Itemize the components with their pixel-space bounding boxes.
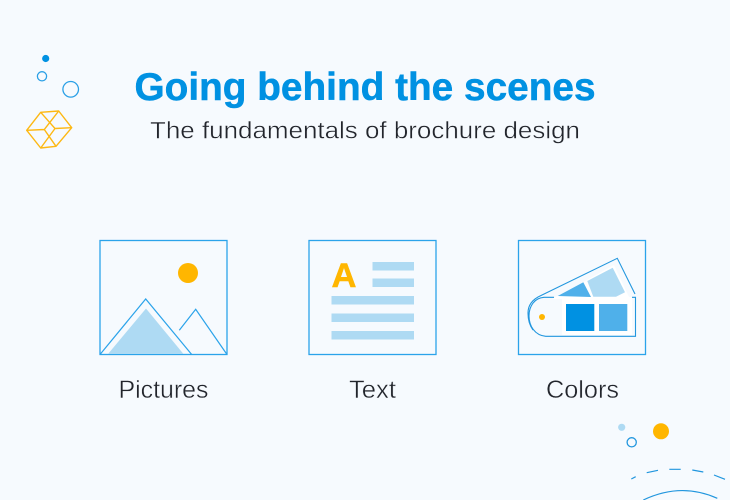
swatch: medium square [599,304,627,331]
swatch white backing [552,265,632,335]
swatch: light [587,268,625,297]
frame [309,240,436,354]
frame [518,240,646,354]
decoration: top-left circles [37,55,78,97]
decoration: yellow wireframe cube [27,111,72,148]
icon: mountain outlines [100,299,227,354]
decoration: dashed arcs [631,469,725,500]
label: colors: Colors [546,376,619,404]
swatch: dark square [566,304,594,331]
icon: letter A: A [332,257,356,295]
decoration: bottom-right circles [618,423,669,447]
panel: colors [518,240,646,354]
label: text: Text [349,376,396,404]
title: Going behind the scenes [134,66,596,109]
icon: swatch outlines [528,258,636,336]
icon: mountain fill [108,308,184,354]
text lines [332,262,414,340]
panel: pictures [100,240,227,354]
subtitle: The fundamentals of brochure design [150,118,580,144]
panel: text [309,240,436,354]
icon: yellow pin [539,314,545,320]
icon: sun [178,263,198,283]
frame [100,240,227,354]
label: pictures: Pictures [118,376,208,404]
swatch: medium fan [558,282,591,297]
